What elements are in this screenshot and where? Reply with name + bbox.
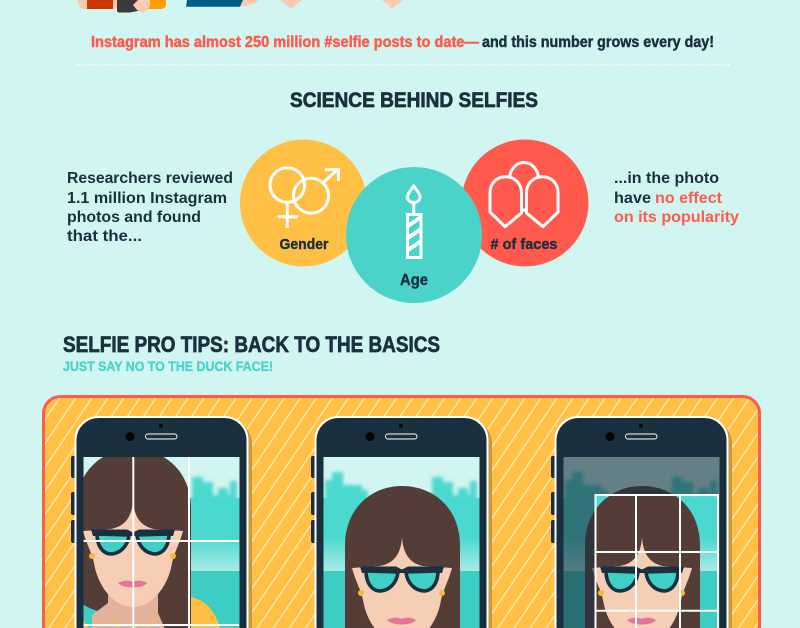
circle: number of faces: # of faces [490,236,558,253]
text block: researchers: that the... [67,228,142,245]
heading: science behind selfies: SCIENCE BEHIND SELFIES [290,89,538,112]
text block: researchers [67,170,233,245]
icon: birthday candle [408,186,421,258]
text block: no effect: on its popularity [614,209,739,226]
subheading: duck face: JUST SAY NO TO THE DUCK FACE! [63,358,273,374]
icon: three faces [490,162,558,227]
text block: no effect [614,170,739,226]
phone 1: rule of thirds, face off-centre [71,417,252,628]
statistic sentence [91,34,714,51]
circle: gender: Gender [280,236,329,253]
panel: pro tips [44,396,760,628]
text block: researchers: photos and found [67,209,201,226]
circle: age [346,167,482,303]
circle: number of faces [462,140,588,266]
phone 3: cropped portrait with grid [551,417,732,628]
circle: gender [240,140,367,266]
text block: researchers: 1.1 million Instagram [67,190,227,207]
statistic sentence: and this number grows every day! [482,34,714,51]
text block: researchers: Researchers reviewed [67,170,233,187]
statistic sentence: Instagram has almost 250 million #selfie posts to date— [91,34,479,51]
phone 2: centred face [311,417,492,628]
text block: no effect: no effect [655,190,723,207]
circle: age: Age [400,272,428,289]
top illustration remnants: hands and phones [77,0,403,13]
heading: selfie pro tips: SELFIE PRO TIPS: BACK TO THE BASICS [63,332,440,357]
icon: gender symbols [270,168,338,228]
text block: no effect: have [614,190,651,207]
text block: no effect: ...in the photo [614,170,719,187]
